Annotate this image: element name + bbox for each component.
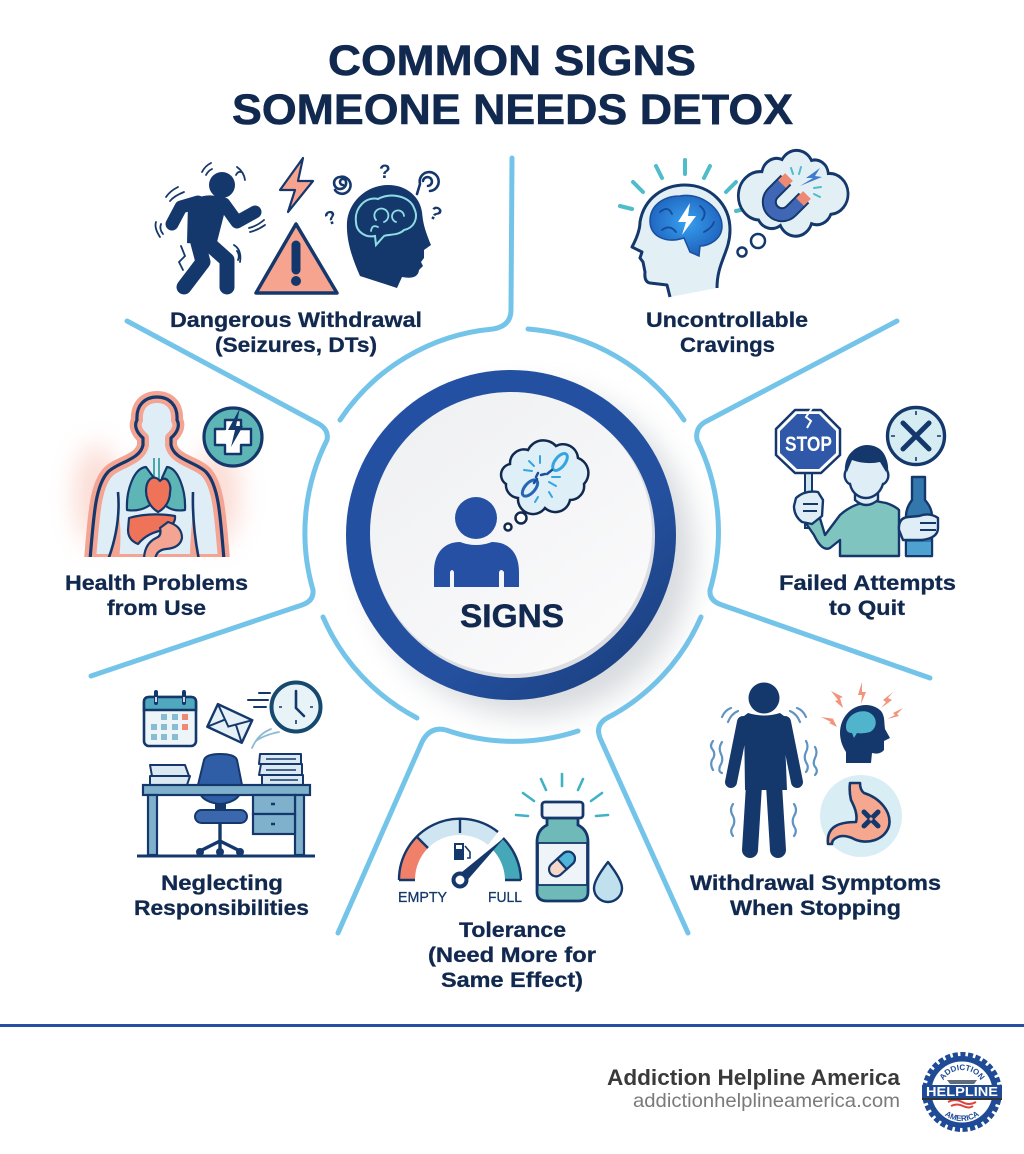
label: Tolerance — [459, 919, 566, 942]
icon: confused head — [322, 162, 445, 288]
icon: desk — [137, 785, 315, 856]
title: SOMEONE NEEDS DETOX — [232, 86, 793, 134]
icon: medicine bottle — [516, 774, 608, 901]
label — [646, 309, 808, 357]
label: from Use — [107, 597, 206, 620]
icon: paper stacks — [150, 754, 303, 785]
icon: water drop — [594, 862, 622, 902]
label: to Quit — [829, 597, 905, 620]
title — [232, 37, 793, 134]
logo badge: HELPLINE — [926, 1084, 998, 1099]
logo badge — [922, 1052, 1002, 1132]
icon: body with organs — [75, 397, 239, 560]
label — [65, 572, 248, 620]
icon: head with brain — [620, 160, 745, 297]
footer brand text: Addiction Helpline America — [607, 1065, 901, 1090]
panel: tolerance — [398, 774, 622, 992]
panel: neglecting responsibilities — [134, 682, 320, 920]
icon: medical cross badge — [204, 408, 262, 466]
label: When Stopping — [730, 897, 901, 920]
icon: head with brain and pain bolts — [821, 682, 903, 763]
footer rule — [0, 1024, 1024, 1027]
panel: dangerous withdrawal — [156, 158, 445, 357]
icon: clock — [248, 682, 320, 748]
label: Failed Attempts — [779, 572, 956, 595]
icon: stop sign — [776, 408, 840, 528]
label — [690, 872, 941, 920]
icon: trembling person — [711, 682, 817, 850]
icon: stop sign: STOP — [785, 433, 832, 456]
icon: person silhouette — [434, 497, 519, 587]
logo badge: ADDICTION — [940, 1064, 985, 1080]
icon: prohibited circle — [888, 408, 944, 464]
label: Dangerous Withdrawal — [170, 309, 422, 332]
icon: confused head: ? — [425, 202, 445, 226]
label: Health Problems — [65, 572, 248, 595]
panel: central signs circle — [346, 370, 694, 716]
panel: health problems — [65, 397, 262, 620]
label: Cravings — [680, 334, 775, 357]
icon: person with shirt — [794, 445, 899, 556]
icon: confused head: ? — [379, 162, 391, 183]
icon: warning triangle — [256, 224, 337, 293]
icon: bottle in hand — [899, 477, 938, 556]
icon: shaking person — [156, 163, 265, 287]
label: Responsibilities — [134, 897, 309, 920]
footer brand text: addictionhelplineamerica.com — [633, 1090, 900, 1112]
label: (Seizures, DTs) — [215, 334, 377, 357]
icon: upset stomach — [820, 775, 902, 857]
icon: calendar — [144, 692, 196, 746]
icon: chair — [195, 754, 247, 856]
footer brand text — [607, 1065, 901, 1112]
icon: envelope — [207, 704, 252, 743]
icon: fuel gauge: FULL — [488, 890, 522, 906]
label — [170, 309, 422, 357]
icon: thought cloud with broken chain — [501, 440, 588, 530]
panel: uncontrollable cravings — [620, 150, 848, 357]
label: (Need More for — [428, 944, 596, 967]
icon: fuel gauge: EMPTY — [398, 890, 447, 906]
label: Neglecting — [161, 872, 283, 895]
icon: thought cloud with magnet — [738, 150, 848, 256]
title: COMMON SIGNS — [328, 37, 696, 85]
label: Same Effect) — [441, 969, 583, 992]
label — [134, 872, 309, 920]
panel: withdrawal symptoms — [690, 682, 941, 920]
label: Withdrawal Symptoms — [690, 872, 941, 895]
segment divider lines — [91, 158, 930, 933]
icon: confused head: ? — [322, 207, 340, 230]
icon: fuel gauge — [398, 819, 522, 906]
center label: SIGNS — [460, 598, 564, 634]
icon: lightning bolt — [280, 158, 313, 212]
label: Uncontrollable — [646, 309, 808, 332]
logo badge: AMERICA — [944, 1112, 980, 1122]
panel: failed attempts — [776, 408, 956, 620]
label — [428, 919, 596, 992]
label — [779, 572, 956, 620]
